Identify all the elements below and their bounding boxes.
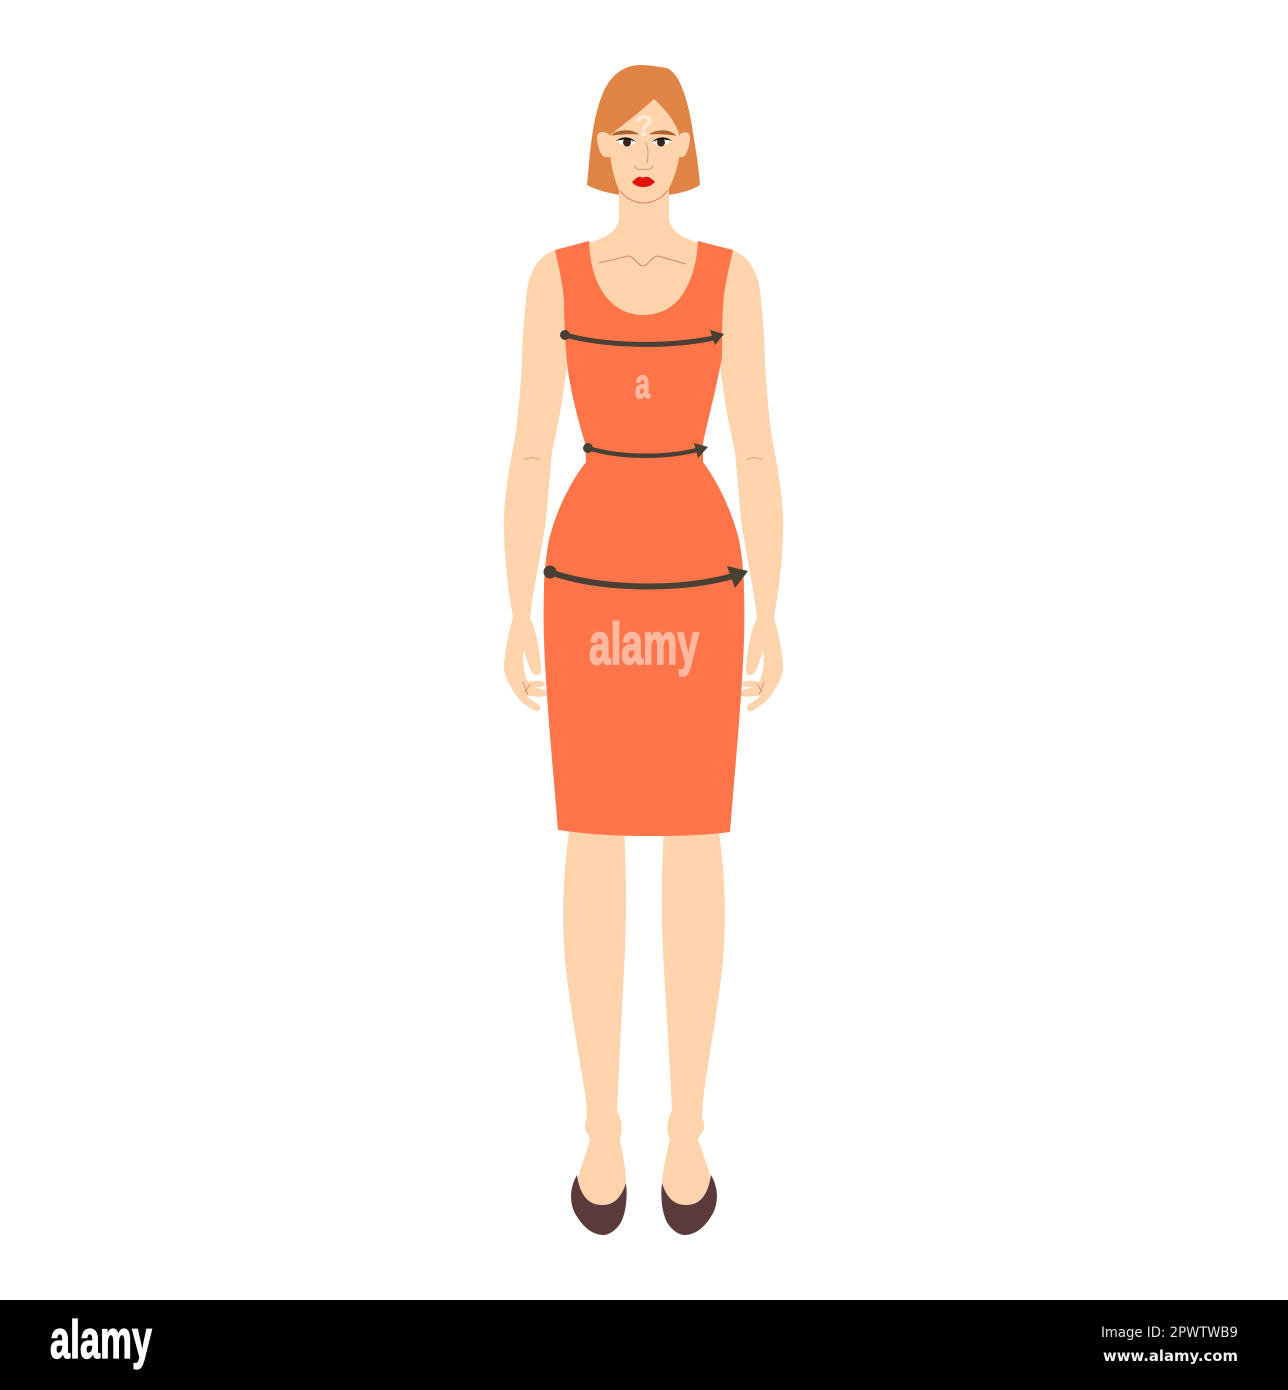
watermark: alamy: alamy	[589, 612, 699, 677]
elbow crease	[747, 458, 763, 460]
nose	[635, 143, 653, 170]
image id: Image ID: 2PWTWB9	[1101, 1325, 1238, 1341]
hair	[587, 65, 700, 195]
figure: woman in orange dress	[504, 65, 783, 1235]
lips	[632, 177, 655, 187]
right arm and hand	[720, 250, 783, 711]
ears	[597, 132, 610, 157]
right shoe	[661, 1175, 717, 1235]
arrow: bust measurement	[560, 330, 724, 345]
footer logo: alamy	[50, 1310, 152, 1370]
neck and chest	[586, 185, 702, 322]
collarbone line	[599, 256, 686, 266]
face	[597, 99, 690, 203]
footer bar	[0, 1300, 1288, 1390]
eyebrows	[612, 131, 638, 135]
arrow: waist measurement	[583, 443, 708, 458]
finger lines	[523, 682, 530, 695]
watermark: small a: a	[635, 360, 650, 407]
chin line	[620, 190, 668, 203]
arrow: hip measurement	[544, 566, 748, 588]
left leg	[563, 825, 626, 1205]
dress	[544, 241, 744, 836]
elbow crease	[524, 458, 540, 460]
watermark: forehead mark: ?	[635, 110, 653, 143]
finger lines	[757, 682, 764, 695]
eyes	[617, 138, 636, 146]
website: www.alamy.com	[1103, 1347, 1238, 1365]
right leg	[662, 825, 725, 1205]
left arm and hand	[504, 250, 567, 711]
left shoe	[571, 1175, 627, 1235]
